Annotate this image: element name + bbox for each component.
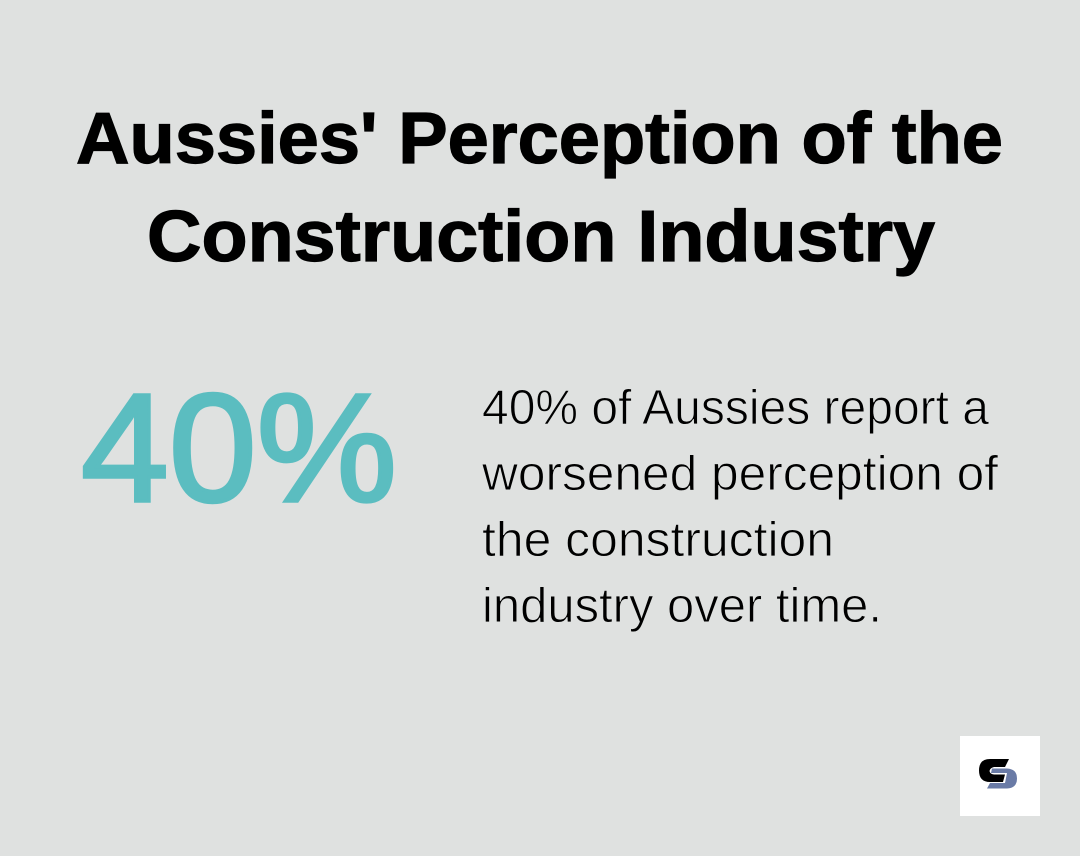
title	[76, 99, 1003, 277]
description text: 40% of Aussies report a	[482, 381, 990, 435]
big statistic: 40%: 40%	[81, 362, 397, 534]
description text: worsened perception of	[481, 447, 998, 501]
icon: blue D mark	[987, 768, 1017, 788]
title: Construction Industry	[147, 197, 935, 277]
icon: black S mark	[979, 759, 1009, 782]
title: Aussies' Perception of the	[76, 99, 1003, 179]
logo badge	[960, 736, 1040, 816]
description text: industry over time.	[482, 579, 882, 633]
description text: the construction	[482, 513, 834, 567]
description text	[481, 381, 998, 633]
